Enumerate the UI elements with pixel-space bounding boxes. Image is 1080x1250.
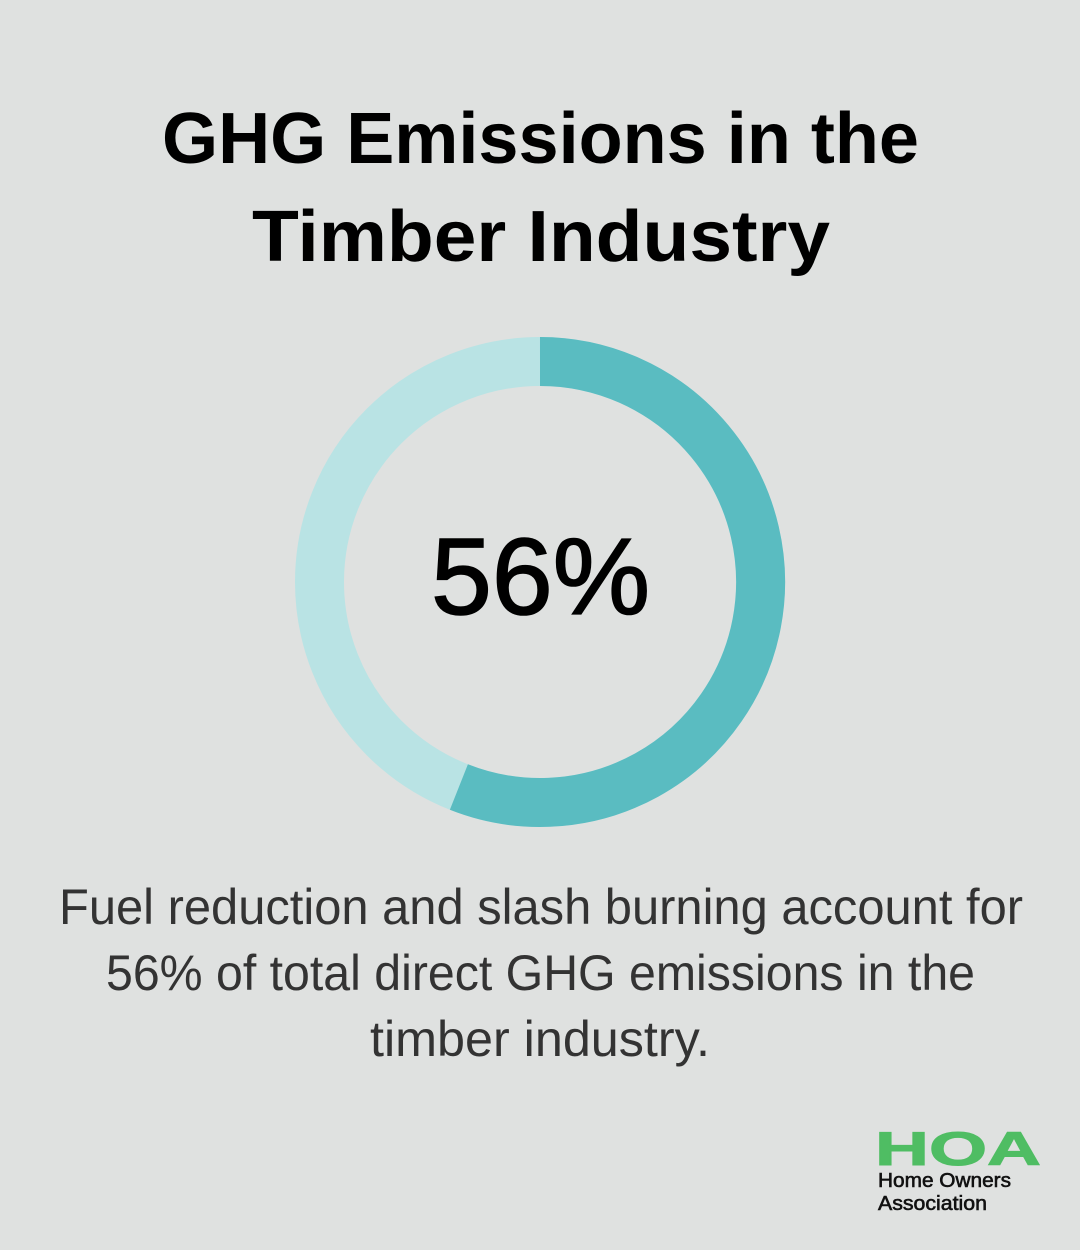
donut value: 56% (431, 516, 650, 638)
description text: timber industry. (370, 1011, 710, 1067)
title (162, 99, 919, 277)
logo: HOA Home Owners Association: HOA (875, 1122, 1041, 1175)
description text: Fuel reduction and slash burning account for (59, 879, 1023, 935)
logo: HOA Home Owners Association (875, 1122, 1041, 1215)
donut chart: 56% (320, 362, 761, 802)
description text (59, 879, 1023, 1067)
description text: 56% of total direct GHG emissions in the (106, 945, 975, 1001)
logo: HOA Home Owners Association: Association (878, 1193, 987, 1215)
logo: HOA Home Owners Association: Home Owners (878, 1170, 1011, 1192)
title: Timber Industry (252, 197, 830, 277)
title: GHG Emissions in the (162, 99, 919, 179)
